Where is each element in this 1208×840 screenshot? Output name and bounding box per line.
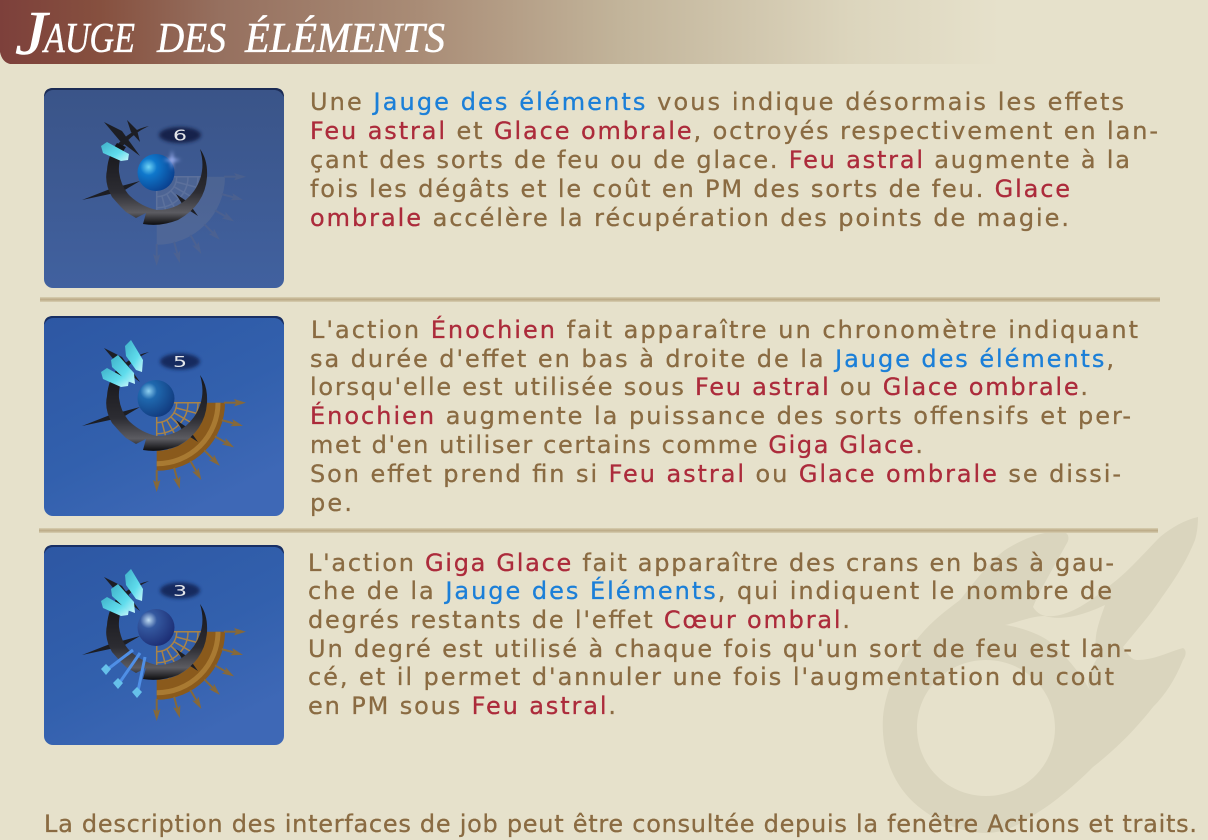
timer chip [160,353,200,371]
text block: Enochien: lorsqu'elle est utilisée sous Feu astral ou Glace ombrale. [310,373,1088,401]
text block: intro: ombrale accélère la récupération des points de magie. [310,204,1069,232]
icon: gauge ring [82,120,207,225]
title text: J [15,0,50,68]
text block: Enochien: met d'en utiliser certains comme Giga Glace. [310,431,923,459]
timer chip: 3 [173,582,187,600]
icon: orb [138,154,174,191]
icon: sparkle [163,150,181,170]
text block: intro: fois les dégâts et le coût en PM des sorts de feu. Glace [310,175,1070,203]
text block: Enochien: pe. [310,489,352,517]
text block: Enochien: Énochien augmente la puissance des sorts offensifs et per- [310,401,1131,430]
timer chip [160,582,200,600]
icon: heart notches [101,650,145,698]
text block: Enochien: sa durée d'effet en bas à droite de la Jauge des éléments, [310,345,1114,373]
timer chip: 6 [173,126,187,144]
title banner [0,0,1000,68]
timer chip [159,126,201,144]
icon: active gauge with umbral hearts [82,569,246,721]
text block: Giga Glace: L'action Giga Glace fait apparaître des crans en bas à gau- [308,549,1114,577]
text block: Enochien [310,315,1138,517]
icon: ice crystal [101,142,129,161]
text block: intro [310,88,1158,232]
icon: active gauge [82,340,246,492]
panel: screenshot gauge 5 [44,316,284,516]
title text: auge [42,0,135,65]
title text: éléments [244,0,445,65]
divider [40,297,1160,302]
text block: Giga Glace [308,549,1132,720]
text block: intro: Feu astral et Glace ombrale, octroyés respectivement en lan- [310,117,1158,145]
text block: Giga Glace: cé, et il permet d'annuler une fois l'augmentation du coût [308,663,1114,691]
text block: Enochien: L'action Énochien fait apparaître un chronomètre indiquant [311,315,1138,344]
icon: inactive gauge fan [153,173,246,266]
text block: Giga Glace: degrés restants de l'effet Cœur ombral. [308,606,850,634]
text block: intro: çant des sorts de feu ou de glace. Feu astral augmente à la [310,146,1130,174]
text block: Enochien: Son effet prend fin si Feu astral ou Glace ombrale se dissi- [310,460,1121,488]
divider [39,528,1158,533]
footer note: La description des interfaces de job peut être consultée depuis la fenêtre Actions et traits. [44,810,1197,838]
text block: intro: Une Jauge des éléments vous indique désormais les effets [310,88,1124,116]
watermark emblem [883,517,1198,833]
text block: Giga Glace: en PM sous Feu astral. [308,692,616,720]
text block: Giga Glace: che de la Jauge des Éléments, qui indiquent le nombre de [308,576,1112,605]
title text [15,0,445,68]
panel: screenshot gauge 3 [44,545,284,745]
timer chip: 5 [173,353,187,371]
panel: screenshot gauge 6 [44,88,284,288]
title text: des [156,0,226,65]
text block: Giga Glace: Un degré est utilisé à chaque fois qu'un sort de feu est lan- [308,635,1132,663]
